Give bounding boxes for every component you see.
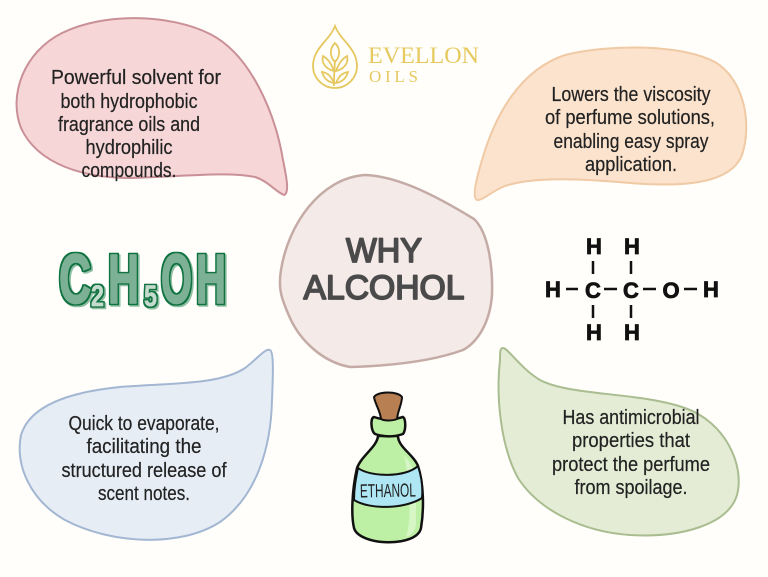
chemical formula: C2H5OH: 5 xyxy=(144,280,157,313)
text: solvent xyxy=(51,67,221,182)
text: antimicrobial: protect the perfume xyxy=(552,454,710,476)
text: evaporation: structured release of xyxy=(62,460,227,482)
cork xyxy=(374,392,402,420)
chemical formula: C2H5OH xyxy=(59,240,226,318)
panel: antimicrobial speech bubble xyxy=(499,348,739,535)
label text: ETHANOL xyxy=(360,481,416,502)
structural formula of ethanol: C xyxy=(585,278,601,303)
logo: Evellon Oils xyxy=(313,26,479,88)
structural formula of ethanol: H xyxy=(586,320,602,345)
text: viscosity: of perfume solutions, xyxy=(545,107,715,129)
text: solvent: fragrance oils and xyxy=(58,114,200,136)
heading: ALCOHOL xyxy=(304,269,464,307)
text: solvent: both hydrophobic xyxy=(60,91,198,113)
text: viscosity xyxy=(545,84,715,176)
structural formula of ethanol: C xyxy=(623,278,639,303)
text: solvent: compounds. xyxy=(82,160,176,182)
highlight xyxy=(404,455,416,537)
text: viscosity: application. xyxy=(585,154,677,176)
text: antimicrobial: Has antimicrobial xyxy=(562,407,700,429)
brand name: EVELLON xyxy=(368,43,479,68)
chemical formula: C2H5OH: H xyxy=(196,240,226,318)
chemical formula: C2H5OH: O xyxy=(161,240,192,318)
structural formula of ethanol: H xyxy=(586,234,602,259)
chemical formula: C2H5OH: 2 xyxy=(91,280,104,313)
text: antimicrobial: properties that xyxy=(572,430,690,452)
label xyxy=(354,466,422,507)
icon: oil drop with leaves xyxy=(313,26,357,88)
structural formula of ethanol: O xyxy=(662,278,680,303)
text: viscosity: enabling easy spray xyxy=(554,131,708,153)
bottle neck xyxy=(371,417,405,436)
chemical formula: C2H5OH: C xyxy=(59,240,91,318)
text: evaporation xyxy=(62,413,227,505)
text: antimicrobial: from spoilage. xyxy=(574,477,688,499)
panel: solvent speech bubble xyxy=(17,18,287,195)
text: solvent: hydrophilic xyxy=(86,137,172,159)
panel: evaporation speech bubble xyxy=(20,350,273,540)
structural formula of ethanol xyxy=(545,234,719,345)
text: evaporation: scent notes. xyxy=(98,483,190,505)
heading: WHY xyxy=(346,232,422,270)
text: solvent: Powerful solvent for xyxy=(51,67,221,89)
brand subtitle: OILS xyxy=(369,67,418,86)
chemical formula: C2H5OH: H xyxy=(108,240,139,318)
structural formula of ethanol: H xyxy=(545,277,561,302)
text: evaporation: facilitating the xyxy=(86,436,202,458)
panel: central Why Alcohol blob xyxy=(280,175,492,367)
panel: viscosity speech bubble xyxy=(475,47,746,200)
bottle body xyxy=(352,436,423,542)
structural formula of ethanol: H xyxy=(703,277,719,302)
structural formula of ethanol: H xyxy=(624,234,640,259)
text: viscosity: Lowers the viscosity xyxy=(552,84,710,106)
text: evaporation: Quick to evaporate, xyxy=(68,413,220,435)
icon: ethanol bottle xyxy=(352,392,423,542)
heading xyxy=(304,232,464,307)
text: antimicrobial xyxy=(552,407,710,499)
structural formula of ethanol: H xyxy=(624,320,640,345)
